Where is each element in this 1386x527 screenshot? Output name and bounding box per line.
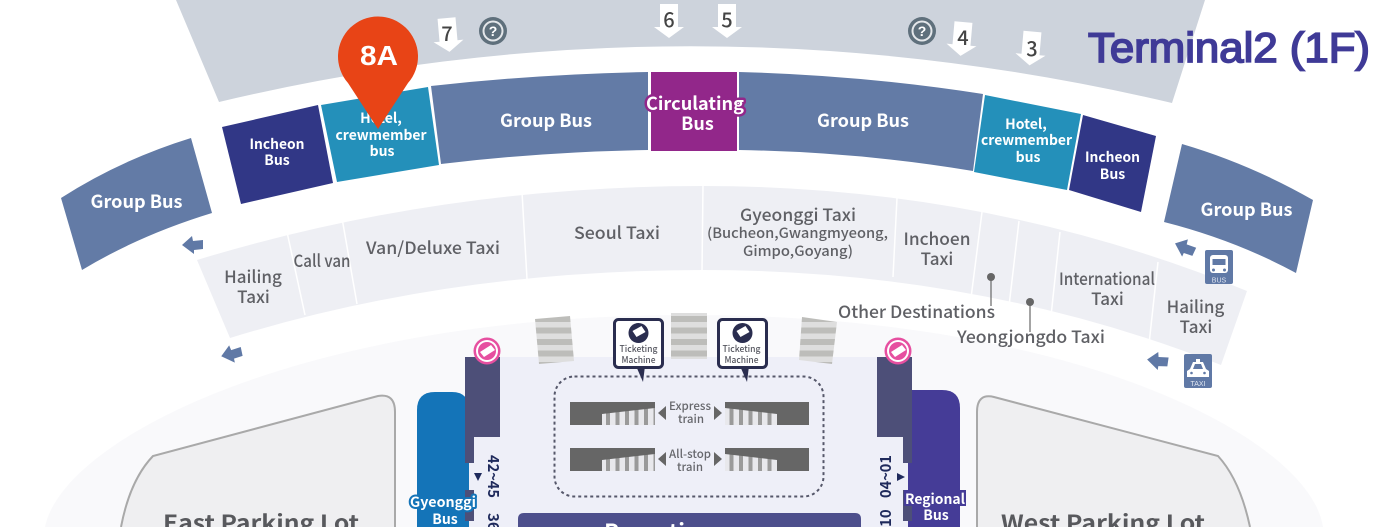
gate number 04-01: 10 <box>875 509 896 527</box>
icon: information right: ? <box>918 23 926 39</box>
gyeonggi bus label: Gyeonggi <box>410 492 476 512</box>
hailing taxi left: Taxi <box>237 283 270 308</box>
hotel crewmember bus right <box>974 95 1081 190</box>
circulating bus: Bus <box>681 110 714 136</box>
arrow 5 <box>712 4 742 38</box>
gyeonggi taxi: (Bucheon,Gwangmyeong, <box>707 223 888 243</box>
panel: taxi zones <box>197 185 1247 365</box>
reception room <box>518 513 861 527</box>
circulating bus <box>646 72 744 151</box>
arrow 6 <box>654 4 684 38</box>
van deluxe taxi: Van/Deluxe Taxi <box>365 234 500 259</box>
express train platform: train <box>678 411 704 427</box>
incheon bus right <box>1069 115 1156 212</box>
arrow: group bus left <box>182 236 203 254</box>
yeongjongdo taxi <box>956 298 1105 348</box>
concourse background <box>45 315 1323 527</box>
gyeonggi taxi <box>707 201 888 261</box>
other destinations <box>838 273 995 323</box>
regional bus label: Regional <box>905 489 966 509</box>
all-stop train platform: All-stop <box>669 446 711 462</box>
gate number 42-45 <box>483 455 504 527</box>
incheon bus right: Bus <box>1100 164 1125 184</box>
gyeonggi taxi: Gyeonggi Taxi <box>740 201 856 226</box>
hailing taxi left <box>224 263 282 308</box>
group bus centre left <box>431 72 648 164</box>
all-stop train platform <box>570 446 809 475</box>
incheon bus right: Incheon <box>1085 147 1140 167</box>
arrow 7: 7 <box>441 18 453 47</box>
international taxi: Taxi <box>1091 285 1124 310</box>
regional bus label <box>904 489 966 525</box>
arrow 3: 3 <box>1026 33 1038 62</box>
hailing taxi right <box>1167 293 1225 338</box>
east parking lot <box>121 396 395 527</box>
hotel crewmember bus right: bus <box>1016 147 1040 167</box>
group bus far right: Group Bus <box>1200 196 1293 222</box>
icon: information left: ? <box>489 23 497 39</box>
hotel crewmember bus left <box>321 87 439 182</box>
international taxi: International <box>1059 265 1155 290</box>
group bus centre left: Group Bus <box>500 107 592 133</box>
incheon bus left: Bus <box>264 150 290 170</box>
hailing taxi right: Hailing <box>1167 293 1225 318</box>
icon: bus: BUS <box>1212 278 1227 284</box>
west shop block <box>465 357 500 463</box>
ticketing machine right <box>718 320 766 382</box>
hailing taxi right: Taxi <box>1180 313 1212 338</box>
inchoen taxi: Inchoen <box>904 225 970 250</box>
arrow 5: 5 <box>721 4 733 33</box>
title: Terminal2 (1F) <box>1088 24 1370 71</box>
group bus centre right <box>739 72 983 171</box>
regional bus label: Bus <box>923 505 949 525</box>
gyeonggi bus label <box>410 492 476 527</box>
location marker 8A <box>338 17 418 129</box>
arrow 3 <box>1015 30 1047 67</box>
regional bus area <box>908 390 960 527</box>
arrow 6: 6 <box>663 4 675 33</box>
gyeonggi taxi: Gimpo,Goyang) <box>743 241 853 261</box>
hotel crewmember bus left: bus <box>370 141 394 161</box>
other destinations: Other Destinations <box>838 298 995 323</box>
icon: information left <box>479 17 507 45</box>
hotel crewmember bus left: Hotel, <box>360 108 402 128</box>
crosswalks <box>535 313 837 364</box>
ticketing machine left <box>614 320 662 382</box>
circulating bus: Circulating <box>646 90 744 116</box>
panel: transportation centre <box>410 313 966 527</box>
icon: ticket left <box>474 338 500 364</box>
express train platform: Express <box>669 398 711 414</box>
international taxi <box>1059 265 1155 310</box>
ticketing machine right: Ticketing <box>722 342 761 355</box>
panel: bus zones <box>61 72 1313 273</box>
upper roadway <box>176 0 1205 103</box>
arrow: taxi right <box>1146 351 1169 371</box>
icon: taxi <box>1184 354 1212 388</box>
gyeonggi bus area <box>417 392 469 527</box>
west parking lot <box>977 396 1250 527</box>
arrow 4: 4 <box>957 22 969 51</box>
seoul taxi: Seoul Taxi <box>574 219 660 244</box>
gate number 04-01: 04~01 <box>875 455 896 498</box>
hotel crewmember bus left: crewmember <box>336 125 427 145</box>
east shop block <box>877 357 912 463</box>
hailing taxi left: Hailing <box>224 263 282 288</box>
ticketing machine left: Ticketing <box>620 342 658 355</box>
incheon bus left: Incheon <box>250 134 304 154</box>
express train platform <box>570 398 809 427</box>
group bus far left: Group Bus <box>90 188 183 214</box>
group bus centre right: Group Bus <box>817 107 909 133</box>
location marker 8A: 8A <box>360 40 398 71</box>
arrow: taxi left <box>219 343 244 365</box>
group bus far right <box>1164 144 1313 273</box>
hotel crewmember bus right: crewmember <box>981 130 1073 150</box>
gate number 04-01 <box>875 455 896 527</box>
icon: taxi: TAXI <box>1190 381 1206 388</box>
icon: information right <box>908 17 936 45</box>
ticketing machine right: Machine <box>724 353 758 366</box>
yeongjongdo taxi: Yeongjongdo Taxi <box>956 323 1105 348</box>
direction markers <box>474 473 905 481</box>
arrow 7 <box>432 17 464 53</box>
call van: Call van <box>294 247 350 272</box>
arrow 4 <box>946 21 978 57</box>
icon: ticket right <box>884 338 912 364</box>
gate number 42-45: 42~45 <box>483 455 504 498</box>
all-stop train platform: train <box>677 459 703 475</box>
panel: train platforms <box>554 376 824 496</box>
inchoen taxi: Taxi <box>921 245 953 270</box>
inchoen taxi <box>904 225 970 270</box>
ticketing machine left: Machine <box>622 353 656 366</box>
hotel crewmember bus right: Hotel, <box>1005 114 1047 134</box>
icon: bus <box>1205 250 1233 284</box>
incheon bus left <box>222 105 333 204</box>
gate arrows <box>432 4 1047 67</box>
arrow: group bus right <box>1171 235 1198 260</box>
group bus far left <box>61 138 212 270</box>
